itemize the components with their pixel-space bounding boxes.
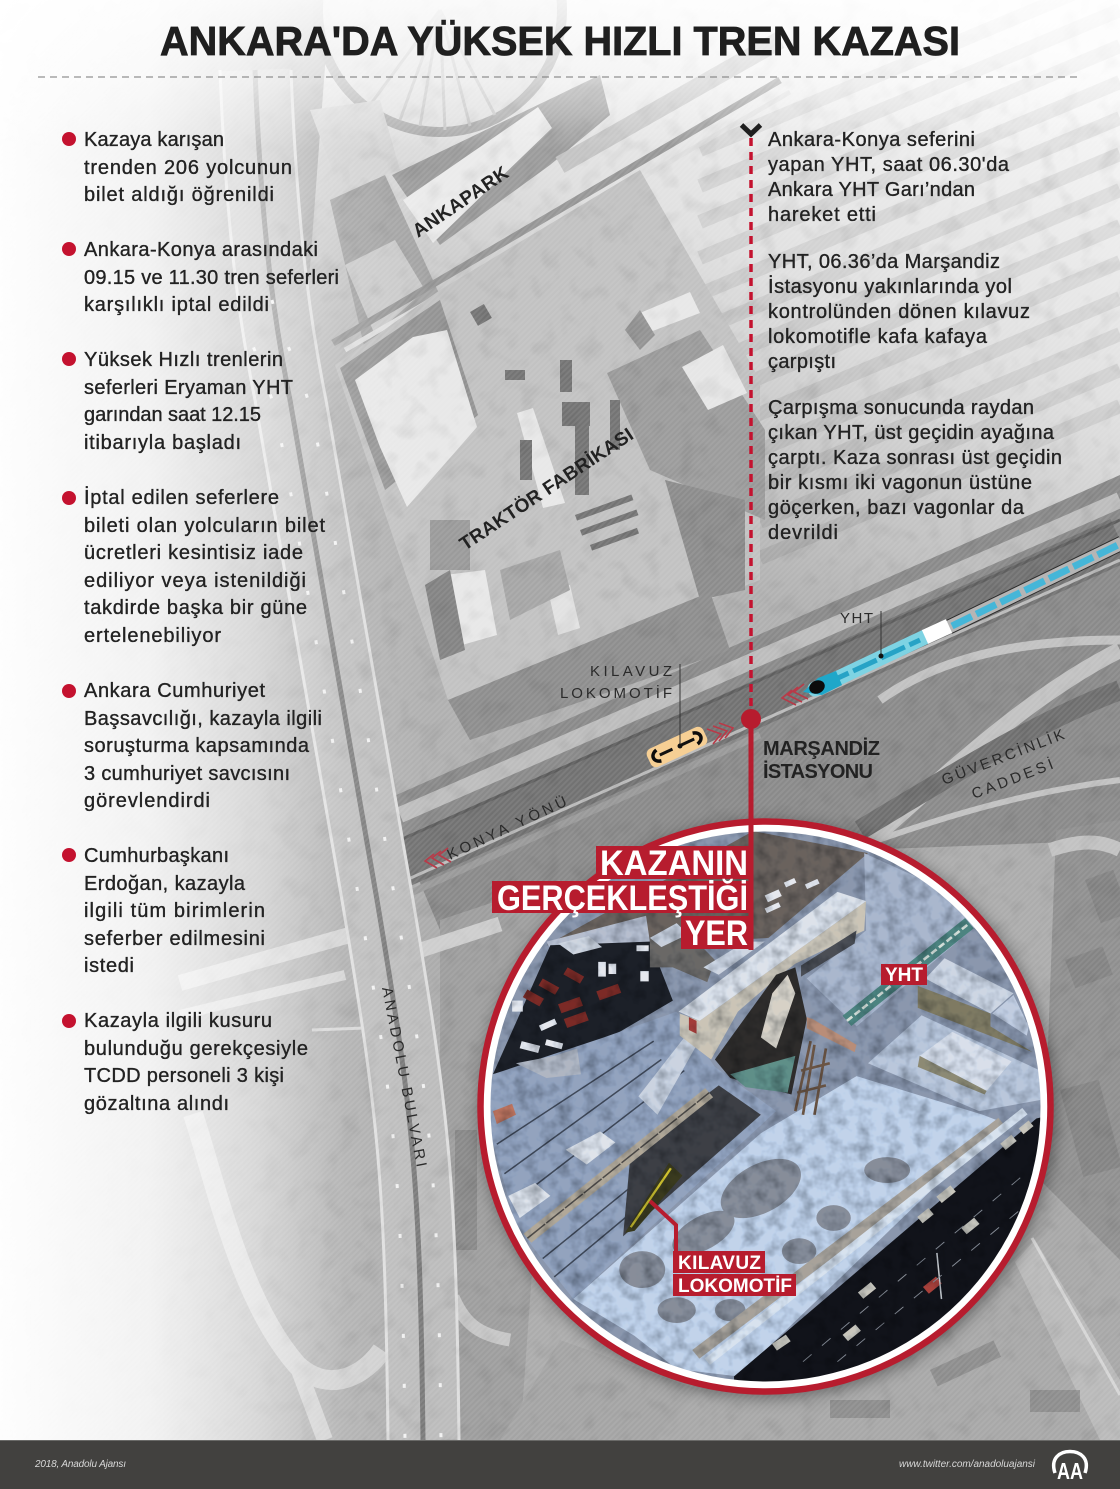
paragraph: collision: İstasyonu yakınlarında yol [768, 275, 1012, 298]
direction label: konya yönü: KONYA YÖNÜ [444, 791, 573, 864]
station label: İSTASYONU [763, 760, 873, 783]
bullet: prosecutors: soruşturma kapsamında [84, 735, 310, 757]
bullet: refunds: ücretleri kesintisiz iade [84, 542, 303, 564]
photo tag: kılavuz lokomotif [650, 1201, 796, 1297]
bullet: passengers: trenden 206 yolcunun [84, 157, 292, 179]
paragraph: collision: lokomotifle kafa kafaya [768, 326, 988, 348]
bullet: detentions: bulunduğu gerekçesiyle [84, 1038, 308, 1060]
ankapark building [392, 75, 610, 245]
locomotive callout [560, 663, 682, 748]
headline tag: kazanın gerçekleştiği yer: KAZANIN [600, 844, 748, 883]
bullet: eryaman: seferleri Eryaman YHT [84, 377, 293, 399]
locomotive chevrons [707, 723, 733, 744]
highway: anadolu bulvarı [180, 70, 500, 1440]
paragraph: collision: çarpıştı [768, 351, 836, 373]
photo tag: kılavuz lokomotif: KILAVUZ [678, 1253, 761, 1274]
map label: ankapark: ANKAPARK [409, 163, 513, 242]
solid pointer from crash site [741, 709, 761, 950]
bullet: eryaman: Yüksek Hızlı trenlerin [84, 349, 283, 371]
mall roof [318, 0, 562, 132]
bullet: refunds: takdirde başka bir güne [84, 597, 307, 619]
paragraph: collision [768, 251, 1030, 373]
bullet: detentions: Kazayla ilgili kusuru [84, 1010, 272, 1032]
bullet: refunds: ertelenebiliyor [84, 625, 221, 647]
bullet: prosecutors: görevlendirdi [84, 790, 210, 812]
paragraph: collision: kontrolünden dönen kılavuz [768, 301, 1030, 323]
left bullet list [62, 129, 339, 1115]
paragraph: aftermath: bir kısmı iki vagonun üstüne [768, 472, 1032, 494]
paragraph: aftermath: göçerken, bazı vagonlar da [768, 497, 1025, 519]
photo tag: kılavuz lokomotif: LOKOMOTİF [678, 1276, 792, 1297]
bullet: cancelled services: 09.15 ve 11.30 tren seferleri [84, 267, 339, 289]
street label: güvercinlik caddesi: CADDESİ [969, 754, 1059, 803]
bullet: president [62, 845, 265, 977]
bullet: cancelled services: karşılıklı iptal edildi [84, 294, 269, 316]
icon: anadolu agency logo [1054, 1452, 1086, 1484]
bullet: president: seferber edilmesini [84, 928, 265, 950]
right narrative text [768, 129, 1062, 544]
paragraph: departure: yapan YHT, saat 06.30'da [768, 154, 1010, 176]
bullet: refunds: İptal edilen seferlere [84, 486, 279, 509]
bullet: president: istedi [84, 955, 134, 977]
station label: MARŞANDİZ [763, 737, 880, 760]
bullet: president: Erdoğan, kazayla [84, 873, 246, 895]
yht callout [840, 610, 884, 658]
bullet: detentions: gözaltına alındı [84, 1093, 229, 1115]
yht train [803, 543, 1120, 696]
bullet: eryaman: garından saat 12.15 [84, 404, 261, 426]
headline tag: kazanın gerçekleştiği yer: GERÇEKLEŞTİĞİ [497, 878, 748, 918]
bullet: detentions: TCDD personeli 3 kişi [84, 1065, 284, 1087]
yht chevrons [782, 684, 808, 705]
street label: güvercinlik caddesi: GÜVERCİNLİK [939, 724, 1071, 789]
bullet: prosecutors: Ankara Cumhuriyet [84, 680, 265, 702]
paragraph: collision: YHT, 06.36’da Marşandiz [768, 251, 1000, 273]
bullet: prosecutors: 3 cumhuriyet savcısını [84, 763, 290, 785]
factory grounds [335, 170, 765, 740]
locomotive callout: LOKOMOTİF [560, 684, 676, 702]
locomotive callout: KILAVUZ [590, 663, 676, 680]
bullet: detentions [62, 1010, 308, 1115]
footer link: www.twitter.com/anadoluajansi [899, 1459, 1036, 1470]
bullet: president: ilgili tüm birimlerin [84, 900, 265, 922]
bullet: eryaman [62, 349, 293, 454]
paragraph: aftermath: çıkan YHT, üst geçidin ayağına [768, 422, 1055, 444]
bullet: passengers [62, 129, 292, 206]
bullet: refunds: ediliyor veya istenildiği [84, 570, 306, 592]
bullet: passengers: bilet aldığı öğrenildi [84, 184, 274, 206]
bullet: eryaman: itibarıyla başladı [84, 432, 241, 454]
photo tag: yht: YHT [885, 965, 923, 986]
timeline arrow: dashed route [742, 125, 760, 706]
paragraph: aftermath [768, 397, 1062, 544]
paragraph: aftermath: çarptı. Kaza sonrası üst geçidin [768, 447, 1062, 469]
pilot locomotive [645, 725, 709, 769]
paragraph: departure [768, 129, 1010, 226]
footer bar [0, 1440, 1120, 1489]
title: ANKARA'DA YÜKSEK HIZLI TREN KAZASI [160, 18, 960, 64]
bullet: refunds [62, 486, 325, 647]
station label [763, 737, 880, 783]
paragraph: departure: Ankara-Konya seferini [768, 129, 975, 151]
icon: anadolu agency logo: AA [1057, 1458, 1083, 1484]
bullet: cancelled services [62, 239, 339, 316]
footer credit: 2018, Anadolu Ajansı [34, 1459, 126, 1470]
bullet: cancelled services: Ankara-Konya arasındaki [84, 239, 318, 261]
map label: traktör fabrikası: TRAKTÖR FABRİKASI [456, 425, 637, 555]
bullet: president: Cumhurbaşkanı [84, 845, 229, 867]
bullet: refunds: bileti olan yolcuların bilet [84, 515, 325, 537]
bullet: prosecutors: Başsavcılığı, kazayla ilgili [84, 708, 322, 730]
bullet: passengers: Kazaya karışan [84, 129, 224, 151]
yht callout: YHT [840, 610, 877, 627]
headline tag: kazanın gerçekleştiği yer [492, 844, 753, 953]
bullet: prosecutors [62, 680, 322, 812]
paragraph: aftermath: devrildi [768, 522, 838, 544]
paragraph: departure: hareket etti [768, 204, 876, 226]
street label: anadolu bulvarı: ANADOLU BULVARI [378, 986, 430, 1172]
circular accident photo [462, 813, 1090, 1417]
paragraph: departure: Ankara YHT Garı’ndan [768, 179, 975, 201]
headline tag: kazanın gerçekleştiği yer: YER [685, 914, 748, 953]
paragraph: aftermath: Çarpışma sonucunda raydan [768, 397, 1034, 419]
